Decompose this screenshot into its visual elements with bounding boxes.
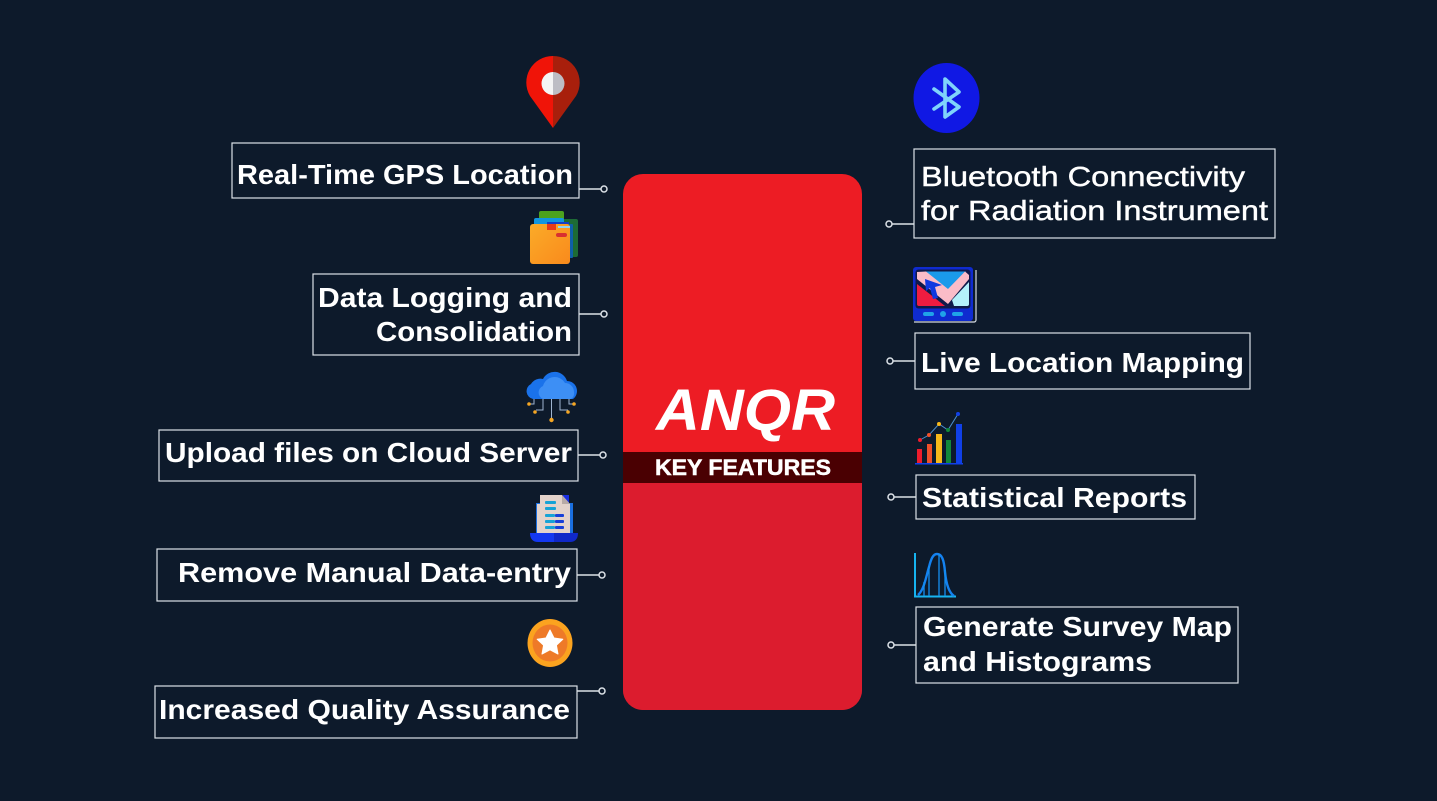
- feature: Live Location Mapping: [887, 333, 1250, 389]
- feature: Live Location Mapping: Live Location Mapping: [921, 347, 1244, 378]
- feature: Upload files on Cloud Server: [159, 430, 606, 481]
- icon: bluetooth: [914, 63, 980, 133]
- feature: Data Logging and Consolidation: Data Logging and: [318, 282, 572, 313]
- feature: Generate Survey Map and Histograms: and Histograms: [923, 646, 1152, 677]
- feature: Data Logging and Consolidation: [313, 274, 607, 355]
- icon: GPS location pin: [526, 56, 580, 128]
- feature: Real-Time GPS Location: Real-Time GPS Location: [237, 159, 573, 190]
- feature: Bluetooth Connectivity for Radiation Instrument: [886, 149, 1275, 238]
- panel: central red phone card: [623, 174, 862, 710]
- feature: Increased Quality Assurance: Increased Quality Assurance: [159, 694, 570, 725]
- feature: Increased Quality Assurance: [155, 686, 605, 738]
- title: ANQR: ANQR: [654, 378, 835, 443]
- feature: Remove Manual Data-entry: Remove Manual Data-entry: [178, 557, 571, 588]
- icon: document on laptop: [530, 495, 578, 542]
- icon: star medal: [528, 619, 572, 667]
- feature: Bluetooth Connectivity for Radiation Instrument: Bluetooth Connectivity: [921, 161, 1245, 192]
- icon: map monitor: [913, 267, 976, 322]
- icon: histogram bell curve: [915, 553, 956, 596]
- feature: Statistical Reports: [888, 475, 1195, 519]
- feature: Statistical Reports: Statistical Reports: [922, 482, 1187, 513]
- feature: Real-Time GPS Location: [232, 143, 607, 198]
- feature: Bluetooth Connectivity for Radiation Instrument: for Radiation Instrument: [921, 195, 1268, 226]
- feature: Remove Manual Data-entry: [157, 549, 605, 601]
- subtitle: key features: KEY FEATURES: [655, 455, 831, 480]
- icon: bar and line chart: [915, 412, 963, 464]
- feature: Generate Survey Map and Histograms: Generate Survey Map: [923, 611, 1232, 642]
- icon: cloud network: [527, 372, 577, 422]
- feature: Data Logging and Consolidation: Consolidation: [376, 316, 572, 347]
- feature: Upload files on Cloud Server: Upload files on Cloud Server: [165, 437, 572, 468]
- icon: stacked folders: [530, 211, 578, 264]
- feature: Generate Survey Map and Histograms: [888, 607, 1238, 683]
